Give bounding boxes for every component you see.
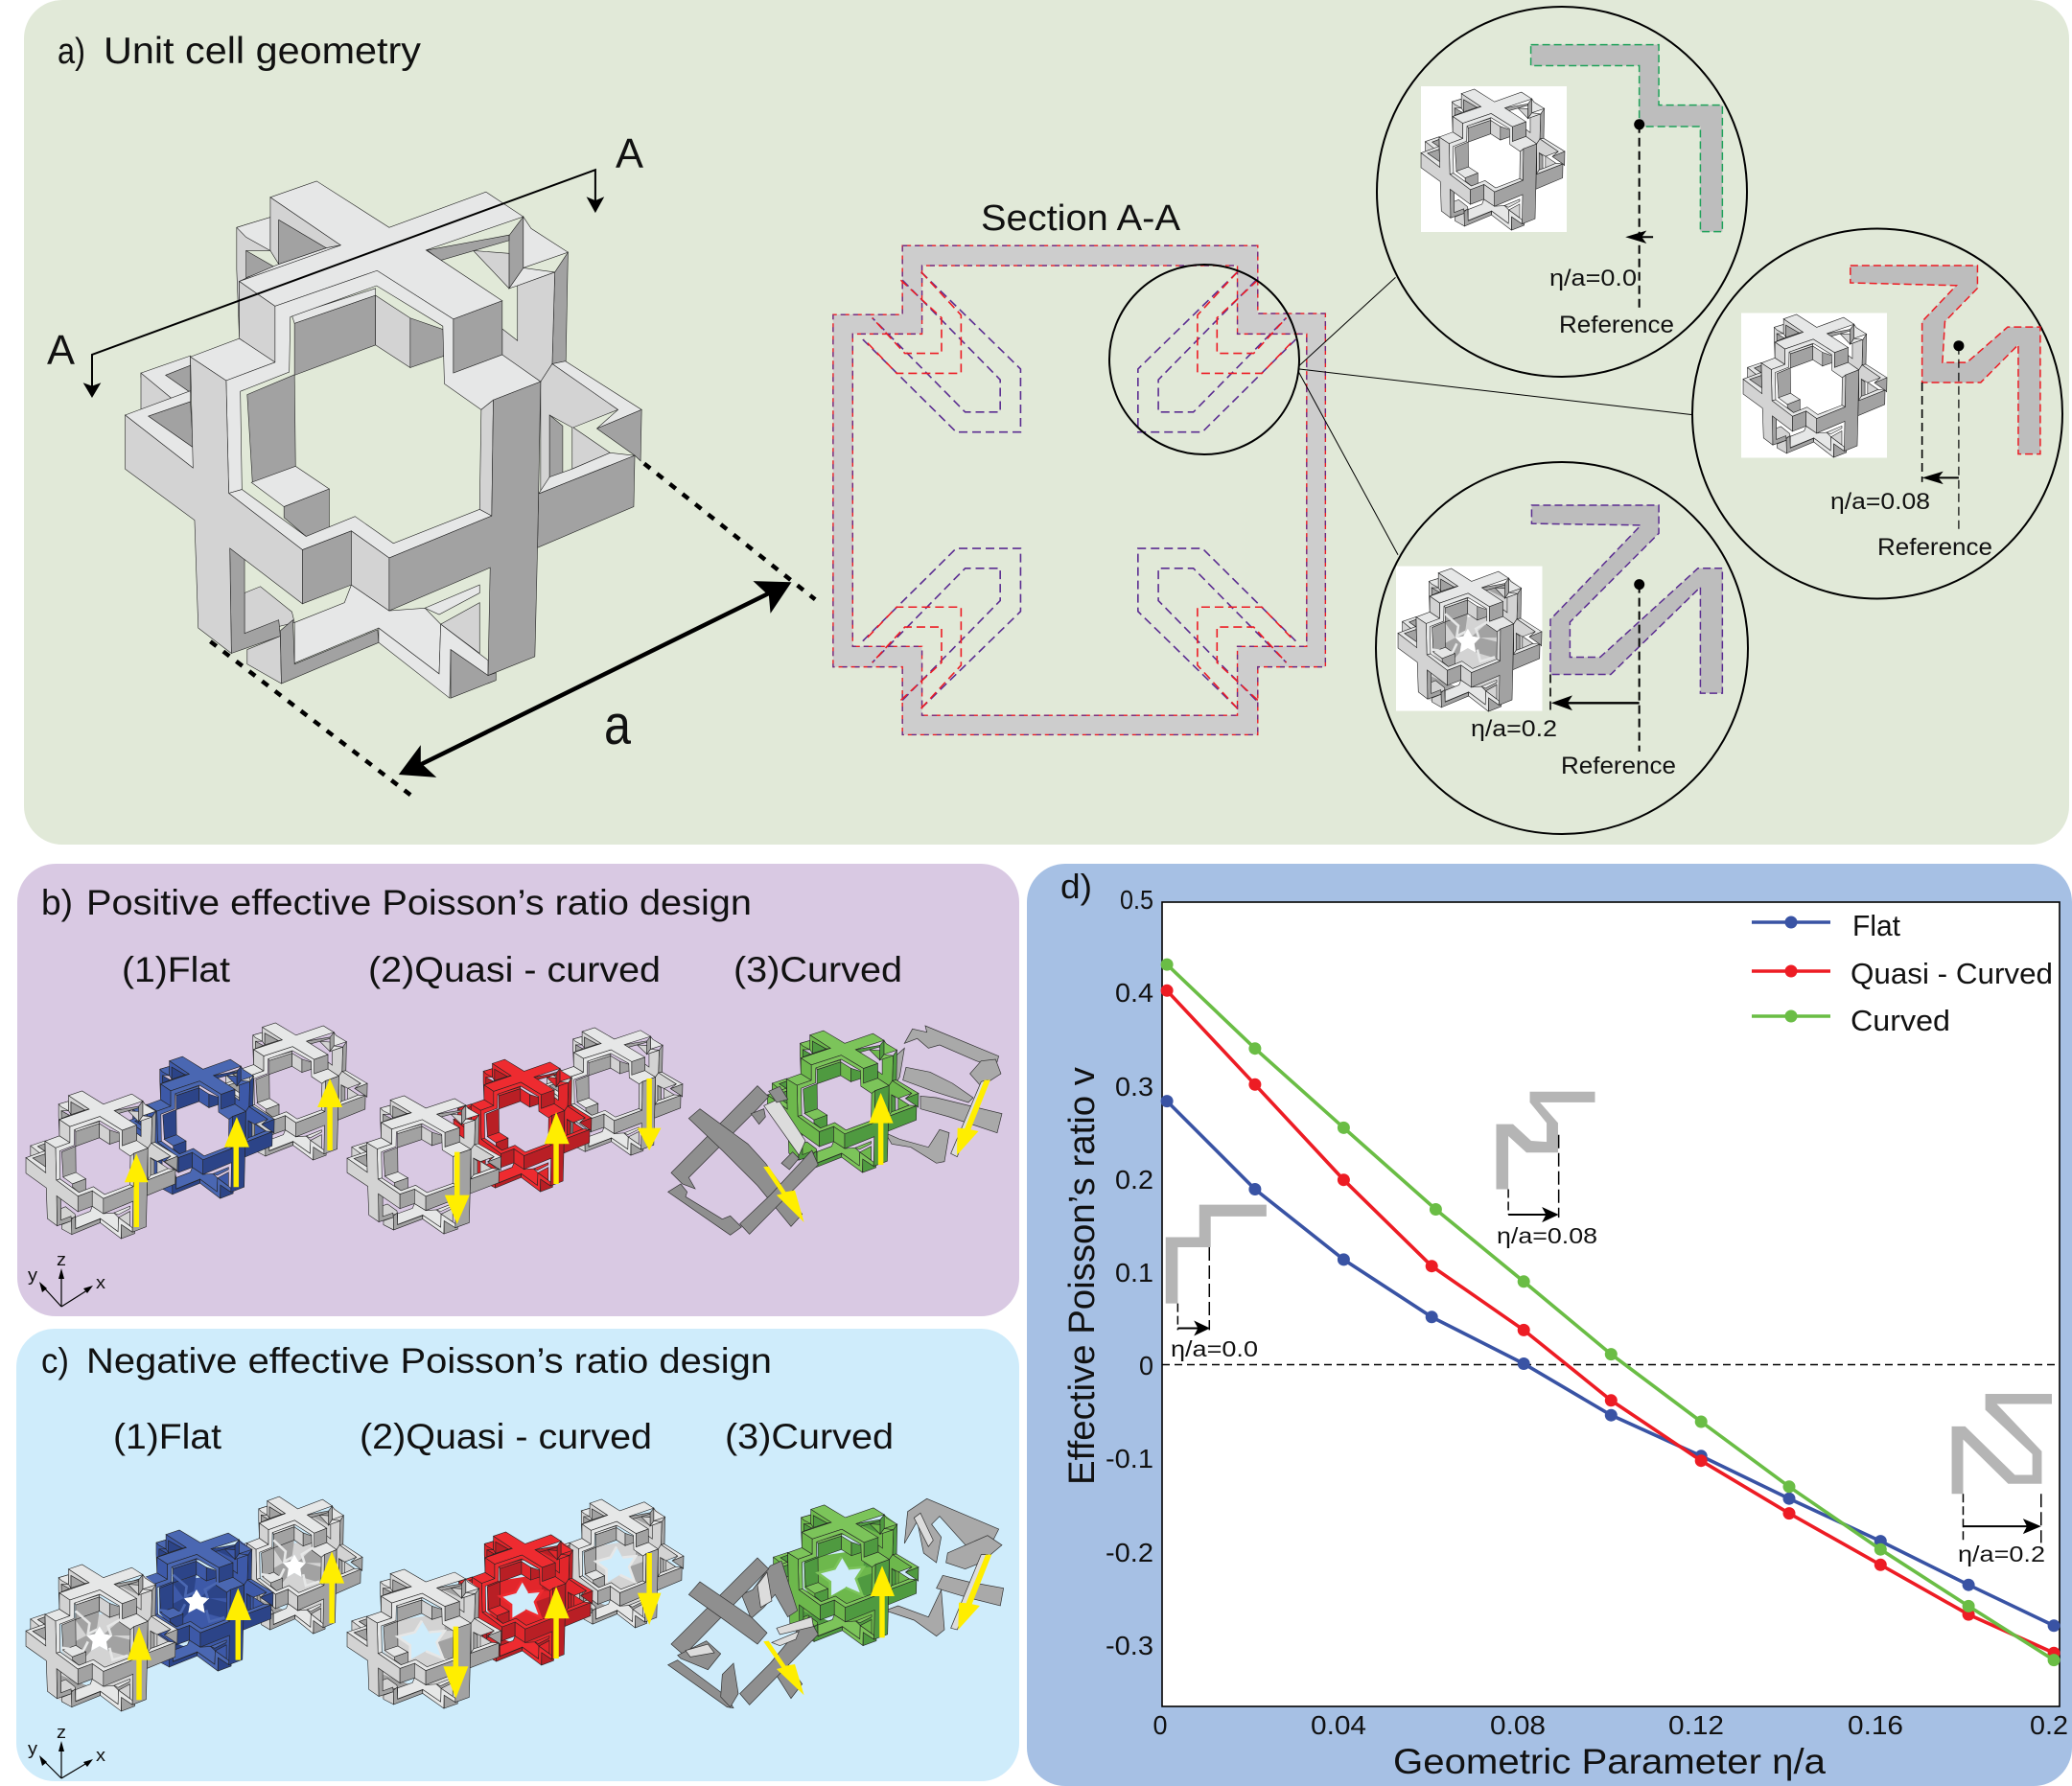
legend: Quasi - Curved [1851, 957, 2053, 990]
x axis tick labels [1152, 1710, 2068, 1740]
yellow load arrows [128, 1551, 991, 1700]
x axis tick labels: 0.16 [1848, 1710, 1903, 1740]
3D unit cell drawing [126, 181, 641, 698]
subheading: (1)Flat: (1)Flat [122, 950, 231, 989]
section A-A cross section [833, 245, 1692, 734]
legend: Curved [1851, 1004, 1950, 1037]
axes triad: x [96, 1273, 105, 1292]
x axis title: Geometric Parameter η/a [1393, 1742, 1826, 1781]
y axis tick labels: -0.1 [1106, 1444, 1153, 1473]
axes triad: y [28, 1265, 37, 1285]
structure: curved positive [668, 1026, 1002, 1235]
heading: a) Unit cell geometry: a) [58, 32, 85, 72]
structure: quasi-curved positive [347, 1028, 683, 1234]
yellow load arrows [125, 1079, 990, 1227]
x axis tick labels: 0 [1152, 1710, 1168, 1740]
dimension arrow a [210, 464, 815, 797]
panel: c) negative effective Poisson's ratio design [16, 1329, 1019, 1781]
heading: c): Negative effective Poisson’s ratio design [86, 1341, 772, 1380]
y axis tick labels [1106, 885, 1153, 1660]
y axis tick labels: -0.3 [1106, 1631, 1153, 1660]
profile inset: eta/a=0.2: η/a=0.2 [1958, 1542, 2045, 1566]
heading: c): c) [41, 1341, 69, 1380]
label d): d) [1060, 867, 1092, 906]
x axis tick labels: 0.08 [1490, 1710, 1546, 1740]
profile inset: eta/a=0.08 [1496, 1092, 1597, 1248]
dark grey cell left [668, 1086, 818, 1235]
subheading: (2)Quasi - curved: (2)Quasi - curved [368, 950, 661, 989]
y axis tick labels: 0.4 [1115, 978, 1153, 1008]
dark grey cell left [668, 1558, 818, 1708]
axes triad: z [57, 1723, 66, 1742]
profile inset: eta/a=0.2 [1952, 1394, 2052, 1566]
section line A-A with arrows [83, 170, 604, 398]
label A left: A [47, 327, 76, 374]
magnifier: eta/a = 0.0: η/a=0.0 [1549, 266, 1637, 291]
structure: curved negative [668, 1498, 1004, 1708]
axes triad: x [96, 1746, 105, 1765]
grey cell right [885, 1026, 1002, 1163]
magnifier: eta/a = 0.2: η/a=0.2 [1471, 716, 1557, 742]
heading: Section A-A: Section A-A [981, 198, 1181, 239]
structure: flat negative [26, 1496, 362, 1711]
detail circle on section [1109, 265, 1299, 454]
axes triad: z [57, 1250, 66, 1269]
subheading: (1)Flat: (1)Flat [113, 1417, 222, 1456]
legend [1752, 909, 2053, 1037]
y axis tick labels: 0.1 [1115, 1258, 1153, 1287]
series: quasi-curved [1161, 985, 2060, 1659]
panel: a) unit cell geometry [24, 0, 2069, 845]
subheading: (3)Curved: (3)Curved [733, 950, 902, 989]
series: flat [1161, 1095, 2060, 1632]
x axis tick labels: 0.2 [2030, 1710, 2068, 1740]
label A right: A [616, 130, 644, 177]
magnifier: eta/a = 0.2: Reference [1561, 753, 1676, 779]
y axis tick labels: 0.3 [1115, 1072, 1153, 1102]
y axis title: Effective Poisson’s ratio v [1062, 1067, 1103, 1485]
y axis tick labels: -0.2 [1106, 1538, 1153, 1567]
zero reference line [1162, 1363, 2060, 1365]
profile inset: eta/a=0.0 [1166, 1205, 1267, 1361]
subheading: (2)Quasi - curved: (2)Quasi - curved [360, 1417, 652, 1456]
magnifier: eta/a = 0.08: η/a=0.08 [1830, 489, 1930, 515]
panel: b) positive effective Poisson's ratio design [17, 864, 1019, 1316]
profile inset: eta/a=0.08: η/a=0.08 [1497, 1223, 1597, 1248]
profile inset: eta/a=0.0: η/a=0.0 [1171, 1336, 1258, 1361]
structure: quasi-curved negative [347, 1499, 684, 1708]
x axis tick labels: 0.04 [1311, 1710, 1366, 1740]
axes triad: y [28, 1739, 37, 1758]
series: curved [1161, 959, 2060, 1666]
green cell [767, 1031, 919, 1172]
y axis tick labels: 0 [1139, 1351, 1153, 1380]
leader lines [1298, 277, 1692, 555]
heading: b): b) [41, 883, 73, 922]
heading: b): Positive effective Poisson’s ratio design [86, 883, 752, 922]
subheading: (3)Curved: (3)Curved [725, 1417, 894, 1456]
structure: flat positive [26, 1023, 367, 1239]
x axis tick labels: 0.12 [1668, 1710, 1724, 1740]
legend: Flat [1852, 909, 1900, 942]
heading: a) Unit cell geometry: Unit cell geometry [104, 31, 422, 72]
green cell [769, 1505, 919, 1646]
y axis tick labels: 0.5 [1120, 885, 1153, 915]
magnifier: eta/a = 0.2 [1376, 462, 1748, 834]
magnifier: eta/a = 0.08: Reference [1877, 534, 1992, 561]
label a: a [604, 694, 632, 756]
axes triad [28, 1723, 105, 1778]
axes triad [28, 1250, 105, 1307]
magnifier: eta/a = 0.08 [1692, 228, 2062, 598]
panel: d) chart [1027, 864, 2072, 1786]
grey cell right [885, 1498, 1004, 1636]
magnifier: eta/a = 0.0 [1377, 7, 1747, 377]
magnifier: eta/a = 0.0: Reference [1559, 312, 1674, 338]
y axis tick labels: 0.2 [1115, 1165, 1153, 1195]
plot area [1162, 902, 2060, 1706]
